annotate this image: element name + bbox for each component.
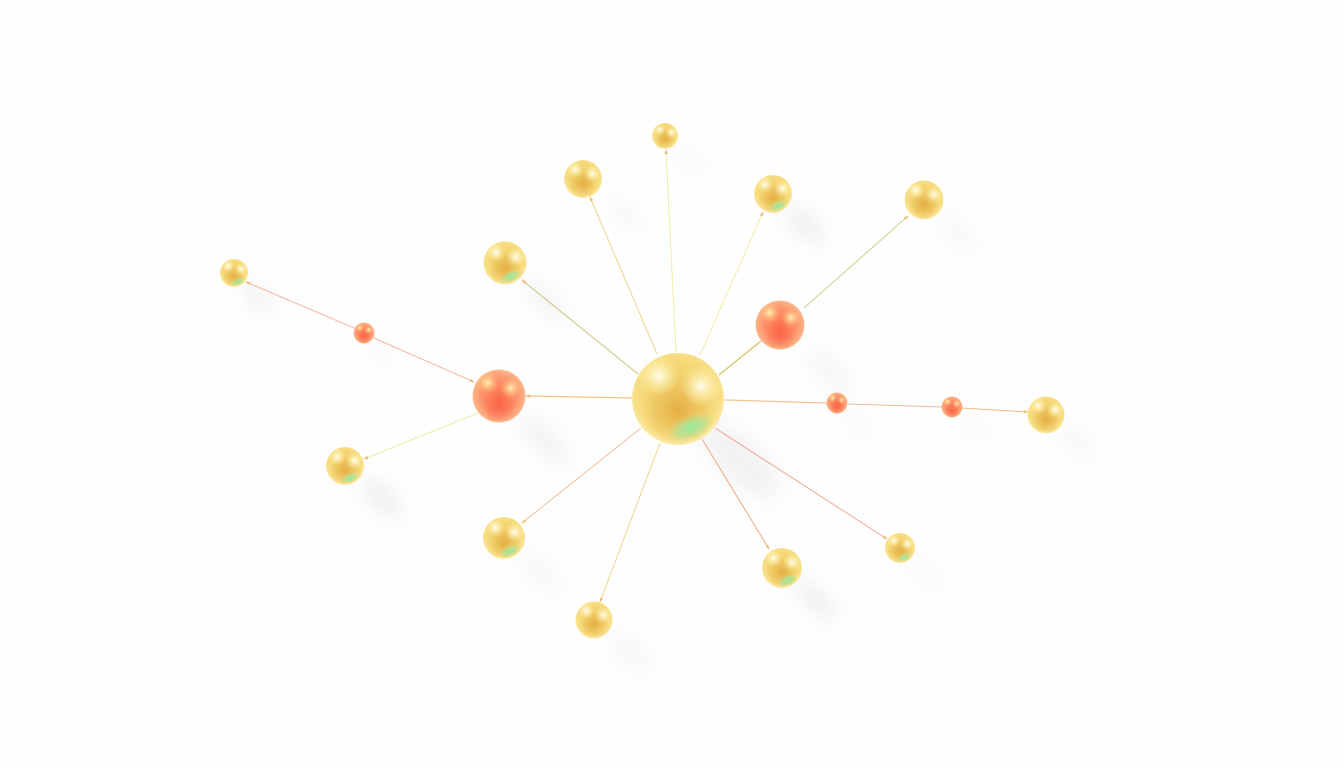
node: bottom bbox=[576, 602, 612, 638]
arrow: small red node to far left node bbox=[246, 282, 354, 328]
node: far upper-right bbox=[904, 180, 944, 220]
arrow: hub to upper-left node bbox=[590, 197, 657, 354]
arrow: hub to lower-right node bbox=[702, 439, 769, 549]
arrow: small red node to red left node bbox=[374, 338, 474, 382]
node: small red right 1 bbox=[826, 392, 848, 414]
arrow: red node to far upper-right node bbox=[804, 216, 908, 308]
central hub sphere bbox=[632, 353, 724, 449]
arrow: hub to first right node bbox=[725, 400, 827, 403]
arrow: hub to bottom node bbox=[600, 443, 660, 602]
arrow: hub to far lower-right node bbox=[715, 428, 887, 539]
arrow: hub to upper-right node bbox=[700, 212, 763, 355]
node: upper-left bbox=[564, 160, 602, 198]
node: far lower-right bbox=[885, 533, 915, 564]
node: red left bbox=[472, 370, 526, 422]
arrow: hub to red upper node bbox=[719, 341, 761, 375]
arrow: first to second right node bbox=[848, 404, 942, 407]
node: small red right 2 bbox=[942, 396, 962, 418]
arrow: hub to top node bbox=[666, 150, 676, 352]
connectors bbox=[246, 150, 1028, 602]
arrow: red left node to lower-left node bbox=[364, 413, 478, 459]
node: far left bbox=[220, 259, 248, 288]
soft sphere shadows bbox=[239, 143, 1097, 675]
arrow: hub to lower-left node bbox=[522, 428, 641, 523]
node: left-upper bbox=[484, 242, 526, 286]
node: lower-left inner bbox=[483, 517, 525, 561]
node: top bbox=[652, 123, 678, 149]
arrow: hub to red left node bbox=[526, 396, 632, 398]
node: far right bbox=[1028, 396, 1064, 434]
node: small red left bbox=[354, 322, 374, 344]
node: upper-right bbox=[754, 175, 792, 214]
node: red upper bbox=[756, 300, 804, 350]
arrow: hub to left-upper node bbox=[522, 280, 638, 374]
arrow: second right node to far right node bbox=[962, 408, 1028, 412]
node: lower-left outer bbox=[326, 447, 364, 486]
node: lower-right bbox=[762, 548, 802, 590]
